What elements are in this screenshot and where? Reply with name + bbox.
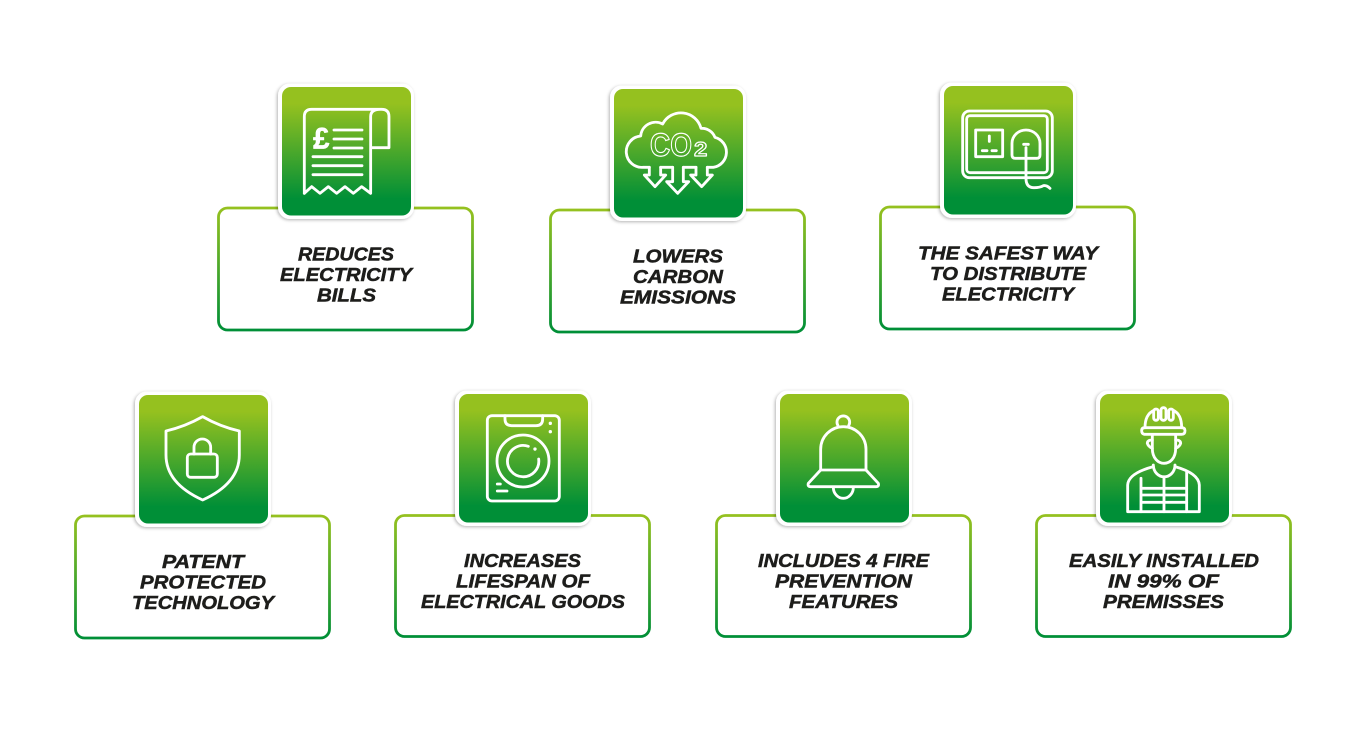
icon tile bbox=[1096, 390, 1232, 526]
icon tile bbox=[940, 82, 1076, 218]
label bbox=[1069, 550, 1259, 612]
label: EASILY INSTALLED bbox=[1069, 550, 1259, 571]
icon: CO2 cloud: CO bbox=[650, 126, 692, 163]
text box bbox=[550, 210, 804, 332]
label: PROTECTED bbox=[140, 572, 266, 592]
card: patent protected technology bbox=[76, 392, 330, 638]
icon: socket and plug bbox=[963, 111, 1052, 188]
card: increases lifespan of electrical goods bbox=[396, 390, 650, 636]
text box bbox=[716, 516, 970, 636]
icon tile bbox=[776, 390, 912, 526]
label: BILLS bbox=[317, 284, 377, 306]
text box bbox=[218, 208, 472, 330]
label: CARBON bbox=[633, 266, 724, 287]
label bbox=[132, 551, 276, 613]
icon: bell bbox=[808, 416, 879, 498]
text box bbox=[396, 516, 650, 636]
label: IN 99% OF bbox=[1108, 570, 1220, 592]
icon tile bbox=[278, 84, 414, 219]
icon: receipt bbox=[304, 109, 389, 193]
label: LOWERS bbox=[633, 246, 724, 266]
label: FEATURES bbox=[789, 591, 899, 612]
icon: worker with hard hat bbox=[1128, 408, 1199, 512]
card: reduces electricity bills bbox=[218, 84, 472, 330]
label: ELECTRICITY bbox=[280, 264, 414, 285]
label bbox=[758, 550, 930, 612]
label: ELECTRICAL GOODS bbox=[421, 591, 626, 612]
icon: CO2 cloud bbox=[626, 113, 726, 193]
label bbox=[280, 244, 414, 306]
text box bbox=[1036, 516, 1290, 636]
label: ELECTRICITY bbox=[942, 284, 1076, 304]
icon: washing machine bbox=[487, 416, 559, 501]
label bbox=[620, 246, 737, 308]
icon tile bbox=[135, 392, 271, 527]
icon: shield and padlock bbox=[166, 417, 239, 500]
label: REDUCES bbox=[298, 244, 395, 264]
label: TO DISTRIBUTE bbox=[930, 263, 1087, 284]
text box bbox=[76, 516, 330, 638]
label: TECHNOLOGY bbox=[132, 592, 276, 613]
icon tile bbox=[610, 86, 746, 221]
card: includes 4 fire prevention features bbox=[716, 390, 970, 636]
label bbox=[918, 242, 1100, 304]
label: LIFESPAN OF bbox=[456, 570, 591, 592]
label: THE SAFEST WAY bbox=[918, 242, 1100, 264]
icon: receipt: £ bbox=[313, 123, 330, 156]
card: lowers carbon emissions bbox=[550, 86, 804, 332]
label: PREMISSES bbox=[1103, 591, 1225, 612]
label: PATENT bbox=[162, 551, 246, 572]
card: safest way to distribute electricity bbox=[880, 82, 1134, 329]
label: PREVENTION bbox=[775, 570, 913, 592]
label bbox=[421, 550, 626, 612]
label: EMISSIONS bbox=[620, 286, 737, 308]
icon tile bbox=[455, 390, 591, 526]
card: easily installed in 99% of premisses bbox=[1036, 390, 1290, 636]
label: INCLUDES 4 FIRE bbox=[758, 550, 930, 571]
label: INCREASES bbox=[464, 550, 582, 571]
text box bbox=[880, 207, 1134, 329]
icon: CO2 cloud: 2 bbox=[694, 139, 707, 161]
